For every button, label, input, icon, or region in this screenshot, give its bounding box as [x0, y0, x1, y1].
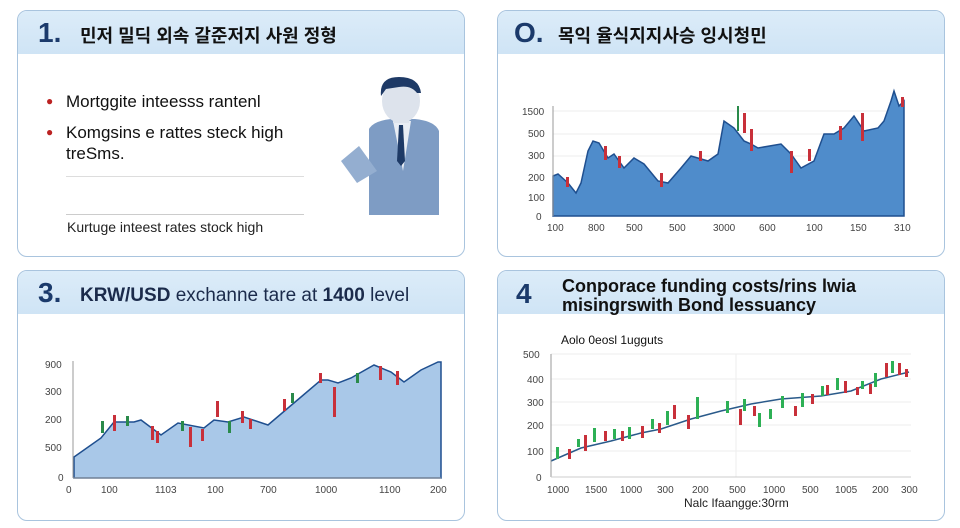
area chart 3: 200: [430, 485, 447, 496]
candlestick chart 4: 1000: [620, 485, 643, 496]
area chart 2: 200: [528, 173, 545, 184]
header 1: 1.: [38, 17, 61, 48]
candlestick chart 4: 200: [527, 421, 544, 432]
area chart 3: 1103: [155, 485, 177, 496]
area chart 2: [522, 88, 911, 234]
area chart 2: 100: [547, 223, 564, 234]
header 1: [18, 11, 464, 54]
area chart 2: 3000: [713, 223, 736, 234]
bullet text: Mortggite inteesss rantenl: [66, 92, 261, 111]
candlestick chart 4: 200: [872, 485, 889, 496]
bullet text: ●: [46, 125, 53, 139]
candlestick chart 4: 0: [536, 473, 542, 484]
header 4: 4: [516, 278, 532, 309]
panel 4: corporate funding: [497, 270, 945, 521]
candlestick chart 4: 500: [802, 485, 819, 496]
header 3: KRW/USD exchanne tare at 1400 level: [80, 285, 409, 306]
area chart 3: 300: [45, 387, 62, 398]
area chart 3: 100: [101, 485, 118, 496]
area chart 2: 0: [536, 212, 542, 223]
area chart 2: 500: [669, 223, 686, 234]
candlestick chart 4: 300: [527, 398, 544, 409]
footer text: Kurtuge inteest rates stock high: [67, 219, 263, 235]
area chart 2: 1500: [522, 107, 545, 118]
area chart 3: 500: [45, 443, 62, 454]
area chart 3: 1000: [315, 485, 338, 496]
area chart 3: 0: [66, 485, 72, 496]
area chart 2: 500: [528, 129, 545, 140]
header 2: O.: [514, 17, 544, 48]
candlestick chart 4: 500: [523, 350, 540, 361]
candlestick chart 4: 1500: [585, 485, 608, 496]
bullet text: [46, 92, 283, 163]
area chart 2: 300: [528, 151, 545, 162]
panel 1: mortgage rates: [17, 10, 465, 257]
candlestick chart 4: 300: [901, 485, 918, 496]
area chart 3: 0: [58, 473, 64, 484]
candlestick chart 4: 1000: [763, 485, 786, 496]
area chart 2: 500: [626, 223, 643, 234]
chart subtitle: Aolo 0eosl 1ugguts: [561, 333, 663, 347]
header 4: misingrswith Bond lessuancy: [562, 295, 816, 315]
candlestick chart 4: 1000: [547, 485, 570, 496]
area chart 2: 100: [528, 193, 545, 204]
area chart 2: 800: [588, 223, 605, 234]
area chart 3: 200: [45, 415, 62, 426]
candlestick chart 4: 500: [729, 485, 746, 496]
panel 2: chart: [497, 10, 945, 257]
area chart 3: 700: [260, 485, 277, 496]
candlestick chart 4: Nalc Ifaangge:30rm: [684, 496, 789, 510]
candlestick chart 4: 200: [692, 485, 709, 496]
header 4: [498, 271, 944, 314]
area chart 3: 1100: [379, 485, 401, 496]
candlestick chart 4: 300: [657, 485, 674, 496]
area chart 3: 100: [207, 485, 224, 496]
header 2: 목익 율식지지사승 잉시청민: [558, 26, 767, 46]
header 3: 3.: [38, 277, 61, 308]
area chart 2: 310: [894, 223, 911, 234]
bullet text: ●: [46, 94, 53, 108]
candlestick chart 4: 100: [527, 447, 544, 458]
panel 3: KRW/USD: [17, 270, 465, 521]
icon: businessman: [341, 77, 439, 215]
header 2: [498, 11, 944, 54]
area chart 2: 150: [850, 223, 867, 234]
area chart 3: 900: [45, 360, 62, 371]
area chart 3: [45, 360, 447, 496]
bullet text: Komgsins e rattes steck high treSms.: [66, 123, 283, 163]
candlestick chart 4: 400: [527, 375, 544, 386]
header 4: Conporace funding costs/rins lwia: [562, 276, 856, 296]
header 1: 민저 밀딕 외속 갈준저지 사원 정형: [80, 26, 337, 46]
area chart 2: 600: [759, 223, 776, 234]
candlestick chart 4: [523, 350, 918, 510]
candlestick chart 4: 1005: [835, 485, 858, 496]
header 3: [18, 271, 464, 314]
area chart 2: 100: [806, 223, 823, 234]
